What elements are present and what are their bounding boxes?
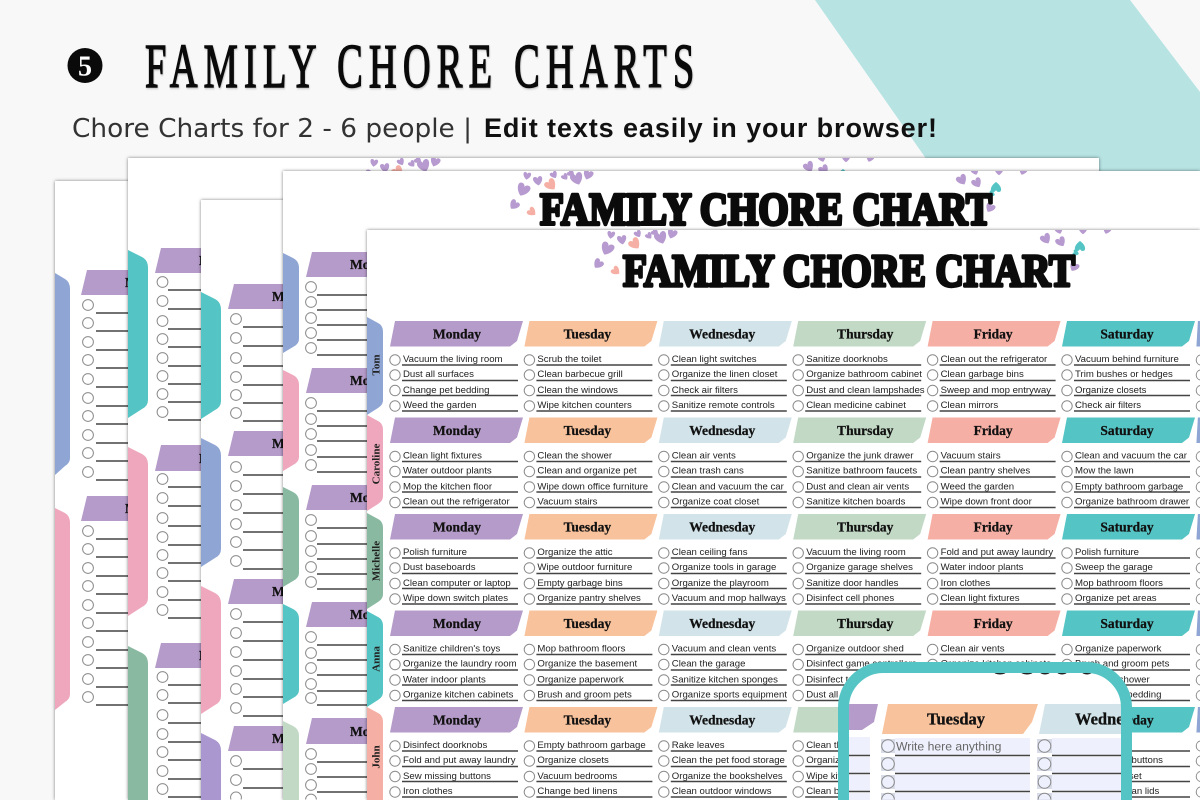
- row: Tom: Wipe kitchen counters: [537, 400, 632, 411]
- row: Caroline: Clean out the refrigerator: [403, 496, 510, 508]
- row: Caroline: Clean and vacuum the car: [672, 482, 785, 492]
- row: Caroline: Clean light fixtures: [403, 450, 482, 462]
- icon: number five badge: [68, 48, 102, 83]
- row: Tom: Clean out the refrigerator: [941, 354, 1048, 365]
- row: Caroline: Clean pantry shelves: [941, 466, 1030, 476]
- row: Michelle: Organize garage shelves: [806, 562, 913, 573]
- row: Anna: Organize kitchen cabinets: [941, 658, 1051, 670]
- row: John: Clean outdoor windows: [672, 786, 772, 797]
- subtitle: Edit texts easily in your browser!: [484, 113, 937, 143]
- row: Michelle: Fold and put away laundry: [941, 547, 1053, 558]
- panel: editable chart callout: [844, 668, 1156, 800]
- row: Anna: Sanitize kitchen sponges: [672, 674, 778, 686]
- row: Michelle: Clean ceiling fans: [672, 547, 748, 558]
- row: Tom: Sanitize doorknobs: [806, 354, 888, 365]
- row: Michelle: Water indoor plants: [941, 562, 1024, 573]
- row: Anna: Organize the basement: [537, 658, 637, 670]
- row: Caroline: [367, 415, 1200, 511]
- row: John: Clean the dryer vent: [806, 740, 893, 751]
- row: Tom: Clean light switches: [672, 354, 757, 365]
- row: Caroline: Mop the kitchen floor: [403, 482, 493, 492]
- row: Michelle: Organize the attic: [537, 547, 613, 558]
- row: Anna: Brush and groom pets: [537, 690, 632, 700]
- hearts decoration: [594, 230, 1112, 274]
- row: John: Organize closet: [1075, 771, 1142, 782]
- row: Michelle: Vacuum the living room: [806, 547, 906, 558]
- panel: chart sheet 2: [128, 153, 1099, 800]
- row: Anna: Organize kitchen cabinets: [403, 690, 514, 700]
- row: Anna: Anna: [370, 646, 382, 672]
- row: Tom: Sweep and mop entryway: [941, 385, 1051, 396]
- row: Anna: Dust all light fixtures: [806, 690, 892, 700]
- row: Anna: Vacuum and clean vents: [672, 644, 776, 654]
- row: Caroline: Organize bathroom drawer: [1075, 496, 1190, 508]
- row: Caroline: Caroline: [370, 444, 382, 484]
- row: Caroline: Organize the junk drawer: [806, 450, 914, 462]
- row: John: Sew missing buttons: [1075, 755, 1163, 766]
- subtitle: [72, 113, 937, 144]
- row: Caroline: Wipe down front door: [941, 496, 1033, 508]
- row: Anna: Organize the laundry room: [403, 658, 517, 670]
- row: Tom: Sanitize remote controls: [672, 400, 775, 411]
- chart title: FAMILY CHORE CHART: [623, 245, 1075, 296]
- row: John: Fold and put away laundry: [403, 755, 516, 766]
- row: Tom: Scrub the toilet: [537, 354, 602, 365]
- row: John: Empty bathroom garbage: [537, 740, 646, 751]
- row: Tom: Wednesday: [689, 326, 756, 342]
- row: John: Wipe kitchen cabinets: [806, 771, 900, 782]
- row: Caroline: Tuesday: [564, 423, 611, 438]
- row: Caroline: Monday: [433, 423, 481, 438]
- panel: editable chart callout: Write here anything: [896, 740, 1001, 754]
- row: Caroline: Clean trash cans: [672, 466, 744, 476]
- panel: chart sheet 2: Monday: [199, 648, 247, 663]
- panel: chart sheet 1: Monday: [125, 501, 173, 516]
- title: FAMILY CHORE CHARTS: [145, 33, 694, 101]
- row: Tom: Organize closets: [1075, 385, 1147, 396]
- row: Anna: Organize outdoor shed: [806, 644, 904, 654]
- icon: number five badge: 5: [78, 52, 92, 82]
- row: Tom: Trim bushes or hedges: [1075, 369, 1173, 380]
- panel: chart sheet 4: FAMILY CHORE CHART: [540, 184, 992, 234]
- row: Anna: Organize sports equipment: [672, 690, 787, 700]
- row: Michelle: [367, 513, 1200, 609]
- panel: chart sheet 4: [283, 166, 1200, 800]
- row: Tom: Clean garbage bins: [941, 369, 1024, 380]
- row: Anna: [367, 610, 1200, 707]
- panel: chart sheet 4: Monday: [350, 724, 398, 739]
- row: Michelle: Thursday: [837, 520, 894, 534]
- panel: chart sheet 2: Monday: [199, 253, 247, 268]
- row: Caroline: Saturday: [1100, 423, 1154, 438]
- row: Michelle: Michelle: [370, 541, 382, 581]
- row: Michelle: Disinfect cell phones: [806, 593, 894, 604]
- row: Caroline: Thursday: [837, 423, 894, 438]
- row: Michelle: Mop bathroom floors: [1075, 578, 1163, 589]
- panel: editable chart callout: Wednesday: [1075, 710, 1156, 728]
- panel: chart sheet 3: [201, 200, 501, 800]
- row: Caroline: Clean and vacuum the car: [1075, 450, 1188, 462]
- row: Caroline: Wipe down office furniture: [537, 482, 648, 492]
- row: Michelle: Iron clothes: [941, 578, 990, 589]
- row: Anna: Water indoor plants: [403, 674, 486, 686]
- row: Caroline: Mow the lawn: [1075, 466, 1134, 476]
- row: Tom: Organize bathroom cabinet: [806, 369, 922, 380]
- row: Anna: Thursday: [837, 616, 894, 631]
- row: Caroline: Dust and clean air vents: [806, 482, 909, 492]
- row: Michelle: Organize tools in garage: [672, 562, 776, 573]
- row: Tom: Check air filters: [672, 385, 738, 396]
- row: Caroline: Clean air vents: [672, 450, 736, 462]
- row: Michelle: Saturday: [1100, 520, 1154, 534]
- row: Michelle: Polish furniture: [1075, 547, 1139, 558]
- row: John: Sew missing buttons: [403, 771, 491, 782]
- panel: chart sheet 1: [55, 181, 355, 800]
- row: Michelle: Tuesday: [564, 520, 611, 534]
- row: Tom: Vacuum behind furniture: [1075, 354, 1179, 365]
- row: Michelle: Organize the playroom: [672, 578, 769, 589]
- row: Caroline: Friday: [974, 423, 1013, 438]
- row: Michelle: Friday: [974, 520, 1013, 534]
- row: John: John: [370, 745, 382, 769]
- row: Anna: Clean air vents: [941, 644, 1005, 654]
- row: Tom: Clean barbecue grill: [537, 369, 623, 380]
- row: Michelle: Wednesday: [689, 520, 756, 534]
- row: Tom: Friday: [974, 326, 1013, 342]
- row: Michelle: Organize pet areas: [1075, 593, 1157, 604]
- panel: chart sheet 3: Monday: [272, 436, 320, 451]
- row: Tom: Clean the windows: [537, 385, 618, 396]
- row: Tom: Organize the linen closet: [672, 369, 778, 380]
- row: John: Organize closets: [537, 755, 609, 766]
- panel: editable chart callout: Tuesday: [927, 710, 986, 728]
- row: Anna: Sanitize children's toys: [403, 644, 500, 654]
- teal diagonal shape: [815, 0, 1200, 220]
- row: Michelle: Vacuum and mop hallways: [672, 593, 786, 604]
- panel: chart sheet 2: Monday: [199, 451, 247, 466]
- panel: chart sheet 3: Monday: [272, 584, 320, 599]
- row: John: Clean the pet food storage: [672, 755, 785, 766]
- row: Caroline: Vacuum stairs: [537, 496, 598, 508]
- row: John: Organize the pantry: [806, 755, 891, 766]
- row: John: Rake leaves: [672, 740, 725, 751]
- row: Caroline: Clean the shower: [537, 450, 613, 462]
- row: Anna: Wednesday: [689, 616, 756, 631]
- row: John: Clean trash can lids: [1075, 786, 1159, 797]
- row: Tom: Weed the garden: [403, 400, 476, 411]
- row: Tom: [367, 317, 1200, 415]
- row: John: Vacuum bedrooms: [537, 771, 617, 782]
- panel: chart sheet 3: Monday: [272, 731, 320, 746]
- row: Anna: Clean the garage: [672, 658, 745, 670]
- row: Tom: Change pet bedding: [403, 385, 489, 396]
- row: Michelle: Wipe down switch plates: [403, 593, 508, 604]
- row: John: Wednesday: [689, 712, 756, 728]
- row: Anna: Mop bathroom floors: [537, 644, 626, 654]
- row: Michelle: Sanitize door handles: [806, 578, 899, 589]
- row: Michelle: Clean light fixtures: [941, 593, 1020, 604]
- row: Caroline: Organize coat closet: [672, 496, 760, 508]
- row: Anna: Tuesday: [564, 616, 611, 631]
- row: Michelle: Sweep the garage: [1075, 562, 1153, 573]
- panel: chart sheet 5 (front): [367, 225, 1200, 800]
- row: Anna: Friday: [974, 616, 1013, 631]
- row: Caroline: Vacuum stairs: [941, 450, 1001, 462]
- row: Anna: Clean the shower: [1075, 674, 1150, 686]
- panel: chart sheet 4: Monday: [350, 490, 398, 505]
- row: Michelle: Monday: [433, 520, 481, 534]
- row: Caroline: Water outdoor plants: [403, 466, 492, 476]
- row: Michelle: Wipe outdoor furniture: [537, 562, 632, 573]
- row: Anna: Change pet bedding: [1075, 690, 1161, 700]
- row: Michelle: Clean computer or laptop: [403, 578, 511, 589]
- row: Tom: Thursday: [837, 326, 894, 342]
- row: John: Change bed linens: [537, 786, 618, 797]
- panel: chart sheet 4: Monday: [350, 607, 398, 622]
- row: Anna: Organize paperwork: [537, 674, 624, 686]
- row: Tom: Clean mirrors: [941, 400, 998, 411]
- panel: chart sheet 4: Monday: [350, 373, 398, 388]
- row: John: [367, 707, 1200, 800]
- row: Michelle: Empty garbage bins: [537, 578, 623, 589]
- row: Tom: Clean medicine cabinet: [806, 400, 906, 411]
- row: Michelle: Dust baseboards: [403, 562, 476, 573]
- row: Michelle: Polish furniture: [403, 547, 467, 558]
- row: John: Iron clothes: [403, 786, 453, 797]
- panel: chart sheet 1: Monday: [125, 275, 173, 290]
- row: Anna: Monday: [433, 616, 481, 631]
- row: Anna: Disinfect trash cans: [806, 674, 890, 686]
- row: John: Clean bathroom mirrors: [806, 786, 907, 797]
- row: Tom: Dust all surfaces: [403, 369, 474, 380]
- row: Caroline: Sanitize kitchen boards: [806, 496, 906, 508]
- row: Caroline: Weed the garden: [941, 482, 1014, 492]
- row: Tom: Dust and clean lampshades: [806, 385, 925, 396]
- row: John: Saturday: [1100, 712, 1154, 728]
- row: Caroline: Sanitize bathroom faucets: [806, 466, 917, 476]
- row: Tom: Vacuum the living room: [403, 354, 503, 365]
- row: Anna: Saturday: [1100, 616, 1154, 631]
- row: John: Monday: [433, 712, 481, 728]
- row: John: Disinfect doorknobs: [403, 740, 487, 751]
- row: John: Tuesday: [564, 712, 611, 728]
- row: Caroline: Wednesday: [689, 423, 756, 438]
- subtitle: Chore Charts for 2 - 6 people |: [72, 114, 472, 144]
- row: John: Organize the bookshelves: [672, 771, 783, 782]
- panel: chart sheet 3: Monday: [272, 289, 320, 304]
- row: Tom: Tuesday: [564, 326, 611, 342]
- row: Caroline: Clean and organize pet: [537, 466, 637, 476]
- row: Tom: Monday: [433, 326, 481, 342]
- row: Tom: Saturday: [1100, 326, 1154, 342]
- row: Tom: Tom: [370, 354, 382, 376]
- row: Anna: Disinfect game controllers: [806, 658, 917, 670]
- row: Anna: Organize paperwork: [1075, 644, 1162, 654]
- panel: chart sheet 4: Monday: [350, 257, 398, 272]
- row: Tom: Check air filters: [1075, 400, 1141, 411]
- row: Caroline: Empty bathroom garbage: [1075, 482, 1183, 492]
- row: Anna: Brush and groom pets: [1075, 658, 1170, 670]
- row: Michelle: Organize pantry shelves: [537, 593, 641, 604]
